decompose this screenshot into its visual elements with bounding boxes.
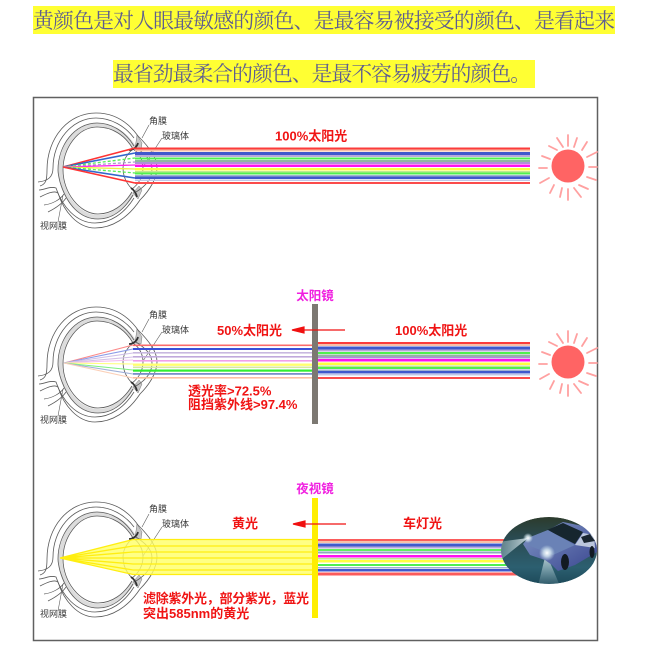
label: retina 1: 视网膜 <box>40 220 67 231</box>
rainbow light beam 1 <box>135 148 530 184</box>
sunglasses lens <box>312 304 318 424</box>
label: 50% sunlight: 50%太阳光 <box>217 323 282 338</box>
night vision lens <box>312 498 318 618</box>
icon: sun 2 <box>539 331 597 396</box>
photo: car with headlights <box>498 517 597 586</box>
label: 100% sunlight 1: 100%太阳光 <box>275 128 347 144</box>
label: retina 3: 视网膜 <box>40 608 67 619</box>
label: yellow light: 黄光 <box>232 516 258 531</box>
label: cornea 2: 角膜 <box>149 309 167 320</box>
label: night vision glasses: 夜视镜 <box>296 481 334 496</box>
panel: sunglasses <box>38 288 597 425</box>
icon: eye diagram 3 <box>38 502 162 617</box>
light fan converging to retina 1 <box>63 148 135 183</box>
arrow: light direction 3 <box>293 521 346 527</box>
icon: sun 1 <box>539 135 597 200</box>
headlight beam left <box>501 538 528 558</box>
label: sunglasses: 太阳镜 <box>296 288 334 303</box>
headlight beam down <box>538 560 558 584</box>
label: headlight: 车灯光 <box>403 516 442 531</box>
label: UV blocking: 阻挡紫外线>97.4% <box>188 397 298 412</box>
label: transmittance: 透光率>72.5% <box>188 384 272 398</box>
label: vitreous 1: 玻璃体 <box>162 130 189 141</box>
label: 100% sunlight 2: 100%太阳光 <box>395 323 467 338</box>
pale beam after sunglasses <box>133 344 312 379</box>
title line 1: 黄颜色是对人眼最敏感的颜色、是最容易被接受的颜色、是看起来 <box>33 10 615 33</box>
panel: night vision glasses <box>38 481 597 621</box>
label: filter description line 1: 滤除紫外光，部分紫光，蓝光 <box>143 591 309 606</box>
label: vitreous 3: 玻璃体 <box>162 518 189 529</box>
light fan converging to retina 2 <box>64 345 133 378</box>
rainbow beam from headlights <box>318 539 523 576</box>
icon: eye diagram 2 <box>38 307 162 422</box>
label: retina 2: 视网膜 <box>40 414 67 425</box>
arrow: sunlight direction 2 <box>292 327 345 333</box>
label: vitreous 2: 玻璃体 <box>162 324 189 335</box>
label: cornea 3: 角膜 <box>149 503 167 514</box>
label: cornea 1: 角膜 <box>149 115 167 126</box>
label: filter description line 2: 突出585nm的黄光 <box>143 606 249 621</box>
panel frame <box>34 98 598 640</box>
icon: eye diagram 1 <box>38 113 162 228</box>
car body <box>523 522 597 571</box>
rainbow beam before sunglasses <box>318 342 530 379</box>
panel: full sunlight <box>38 113 597 231</box>
title line 2: 最省劲最柔合的颜色、是最不容易疲劳的颜色。 <box>113 63 531 86</box>
yellow beam lines <box>60 540 312 574</box>
yellow light cone <box>60 539 312 575</box>
